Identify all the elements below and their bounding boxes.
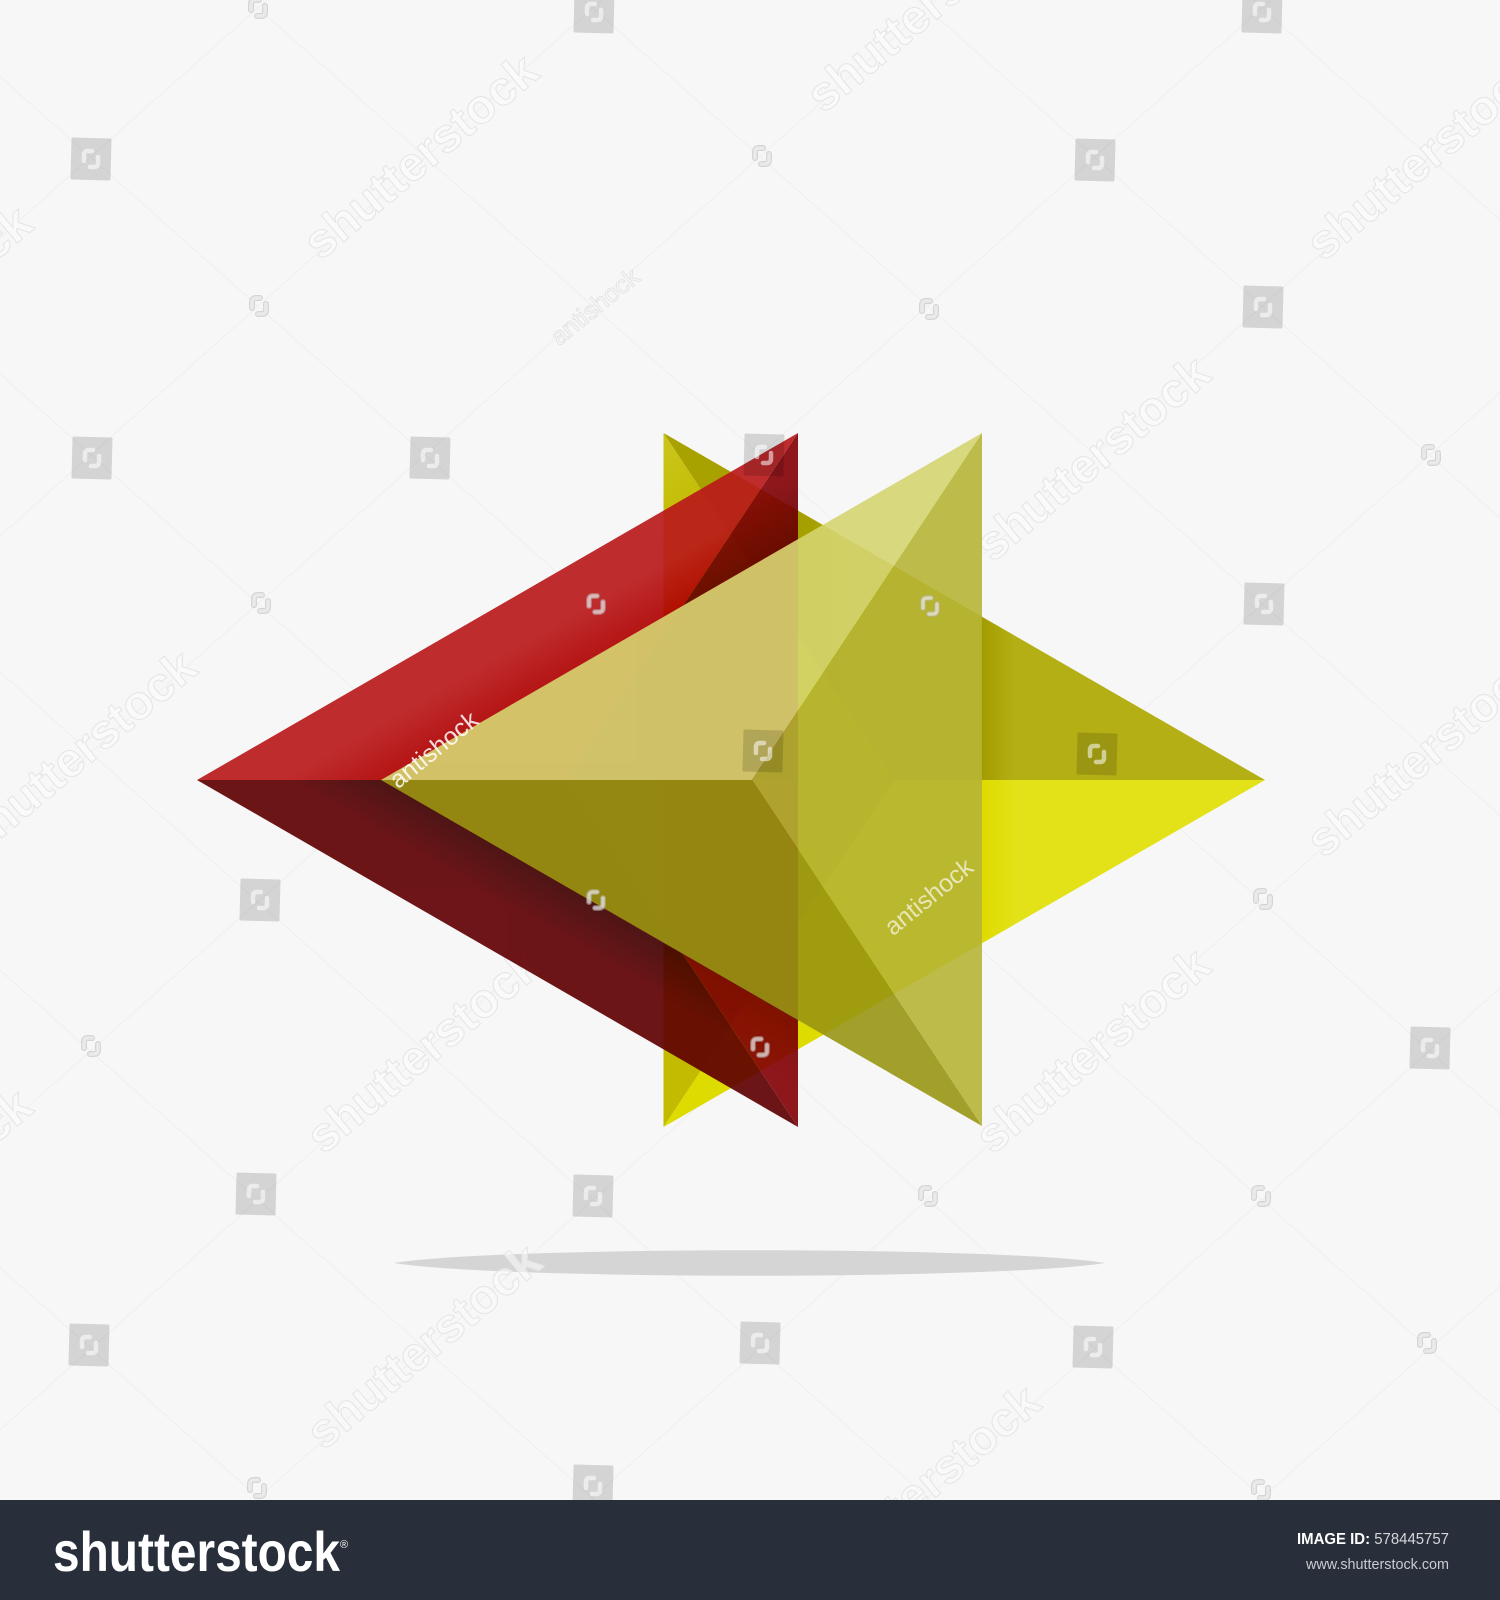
watermark texts: shutterstock: shutterstock <box>297 938 552 1164</box>
author watermark labels on arrow <box>384 706 979 941</box>
arrow: middle red triangle <box>197 433 798 1127</box>
footer logo: shutterstock <box>53 1520 341 1583</box>
lower watermarks over shadow: shutterstock <box>796 1375 1051 1600</box>
image id: IMAGE ID: 578445757 <box>1297 1531 1449 1548</box>
author watermark labels on arrow: antishock <box>879 853 979 941</box>
watermark texts: shutterstock: shutterstock <box>966 346 1221 572</box>
registered mark: ® <box>340 1539 348 1551</box>
footer bar <box>0 1500 1500 1600</box>
watermark texts: shutterstock: shutterstock <box>966 938 1221 1164</box>
lower watermarks over shadow: shutterstock <box>297 1234 552 1460</box>
website: www.shutterstock.com <box>1305 1556 1449 1573</box>
author watermark labels on arrow: antishock <box>384 706 484 794</box>
arrow: back yellow triangle <box>664 433 1265 1127</box>
arrow: front translucent olive triangle <box>381 433 982 1126</box>
watermark texts: shutterstock: shutterstock <box>294 44 549 270</box>
watermark texts: shutterstock: antishock <box>545 263 645 351</box>
ground shadow <box>394 1250 1105 1276</box>
lower watermarks over shadow <box>297 1234 1051 1600</box>
